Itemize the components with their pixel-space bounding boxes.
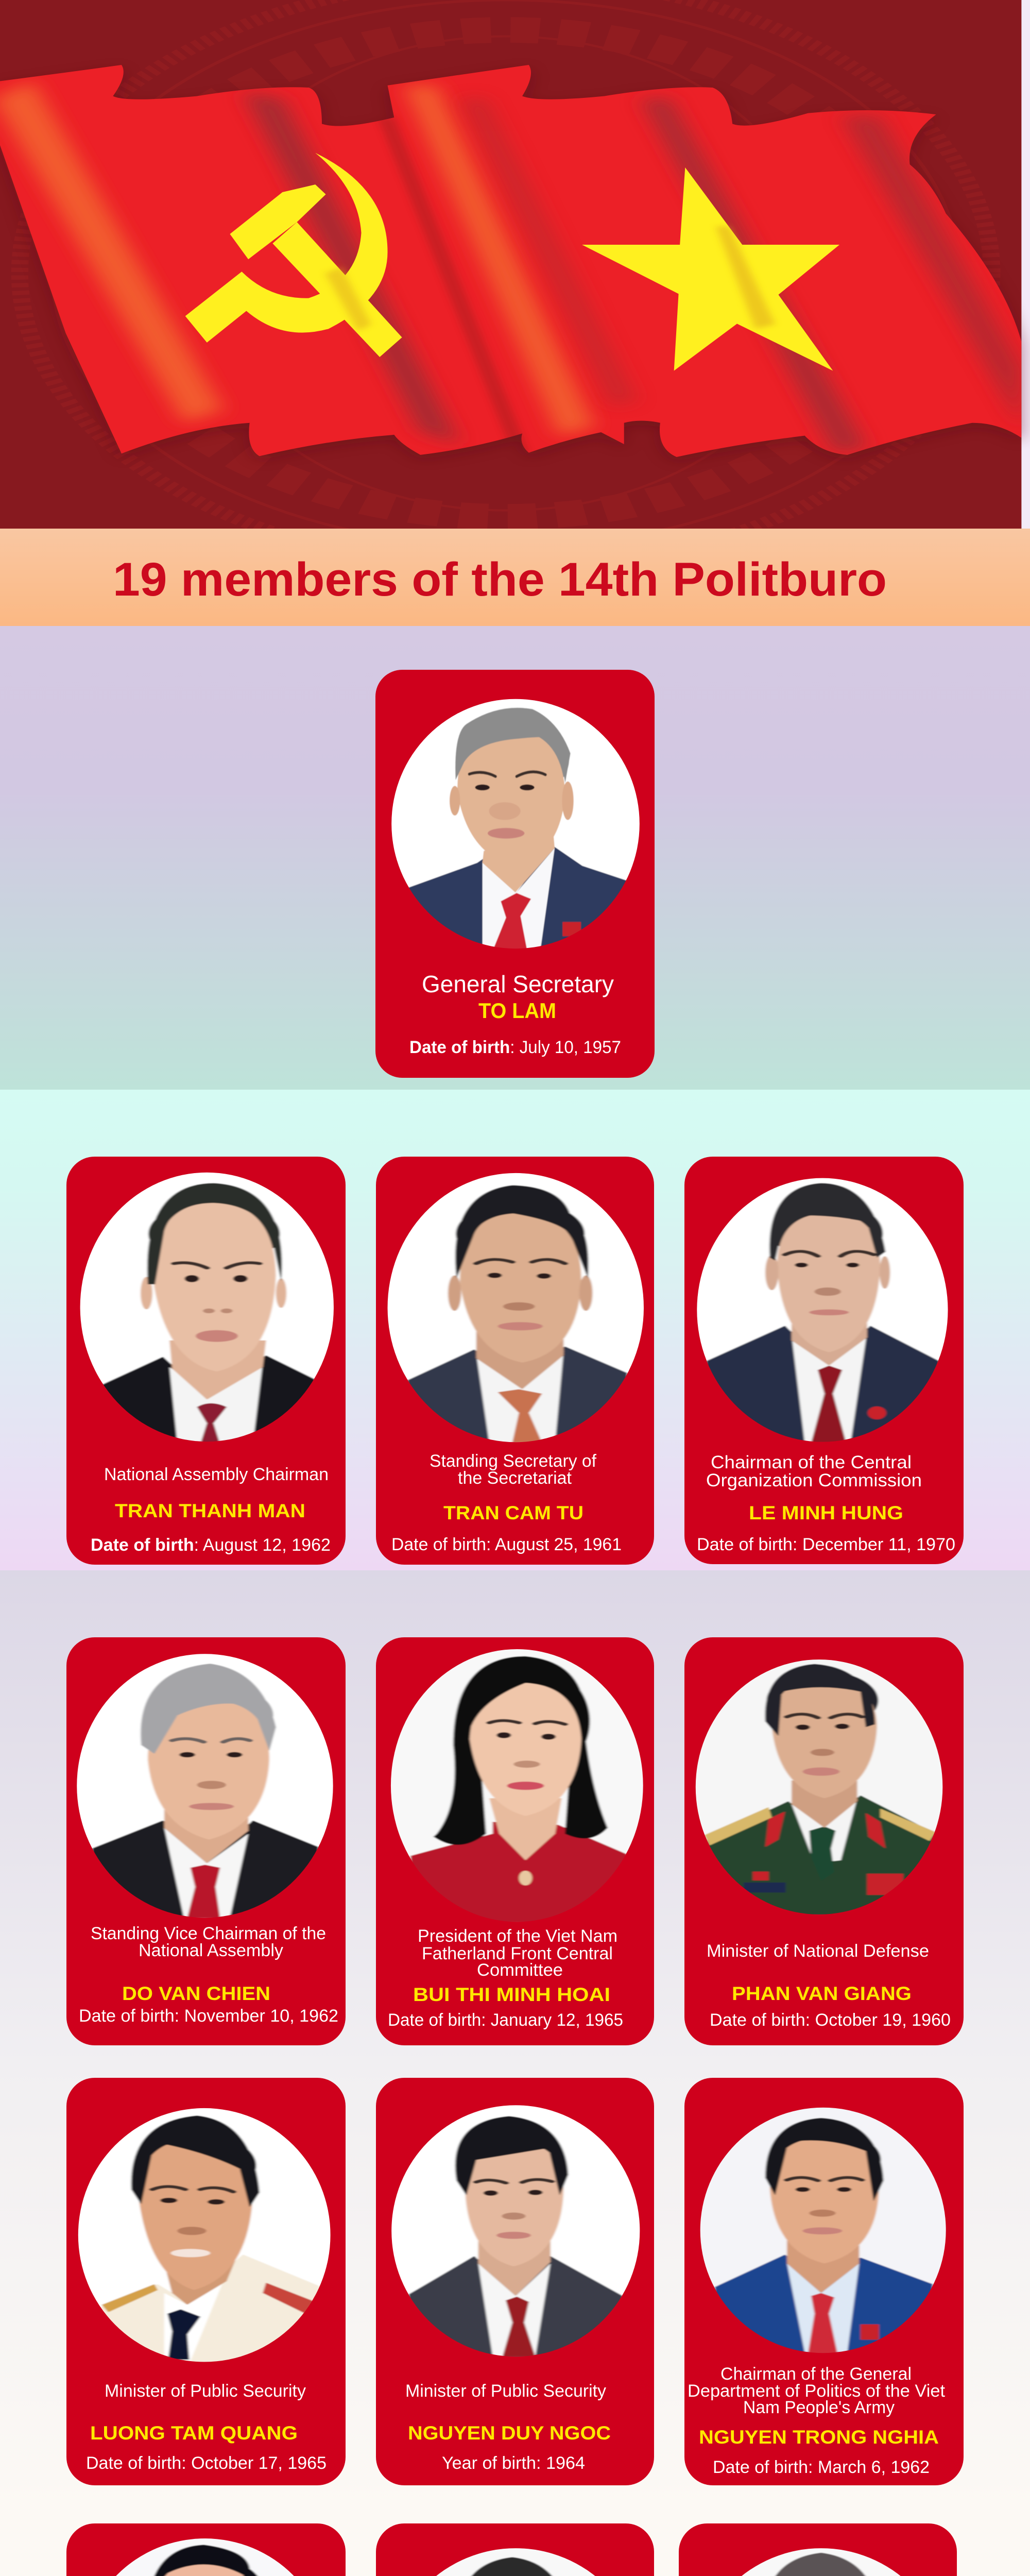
- role: Committee: [477, 1960, 563, 1980]
- portrait: Le Minh Tri: [683, 2533, 966, 2576]
- role: [688, 2364, 946, 2417]
- page background: section one: [0, 626, 1030, 1090]
- role: Fatherland Front Central: [422, 1944, 613, 1963]
- card: PHAN VAN GIANG: [683, 1637, 966, 2045]
- title band: [0, 529, 1030, 626]
- role: Minister of Public Security: [405, 2381, 606, 2401]
- date of birth: Date of birth: January 12, 1965: [388, 2010, 623, 2030]
- role: Standing Secretary of: [430, 1451, 597, 1471]
- card: LE MINH TRI: [679, 2523, 966, 2576]
- role: Minister of National Defense: [707, 1941, 929, 1961]
- date of birth: Date of birth: August 25, 1961: [391, 1535, 622, 1554]
- banner margin strip: [1021, 0, 1030, 529]
- role: General Secretary: [422, 971, 614, 997]
- portrait: Luong Tam Quang: [66, 2095, 362, 2379]
- icon: yellow star: [582, 167, 839, 371]
- portrait: Le Minh Hung: [697, 1178, 948, 1442]
- name: DO VAN CHIEN: [122, 1983, 270, 2004]
- name: TO LAM: [478, 998, 556, 1023]
- role: Chairman of the Central: [711, 1452, 912, 1472]
- portrait: Le Hoai Trung: [374, 2533, 657, 2576]
- role: [706, 1452, 922, 1490]
- portrait: Phan Van Giang: [683, 1641, 966, 1925]
- role: the Secretariat: [458, 1468, 572, 1488]
- date of birth: Date of birth: October 17, 1965: [86, 2453, 327, 2473]
- card: NGUYEN TRONG NGHIA: [683, 2078, 966, 2485]
- portrait: Bui Thi Minh Hoai: [374, 1641, 657, 1925]
- portrait: Do Van Chien: [77, 1654, 333, 1918]
- role: National Assembly Chairman: [104, 1465, 329, 1484]
- portrait: To Lam: [388, 697, 650, 952]
- name: NGUYEN TRONG NGHIA: [699, 2427, 939, 2448]
- portrait: Trinh Van Quyet: [66, 2533, 362, 2576]
- role: [418, 1926, 617, 1980]
- portrait: Tran Cam Tu: [387, 1173, 644, 1443]
- role: [430, 1451, 597, 1488]
- portrait: Nguyen Duy Ngoc: [374, 2095, 657, 2379]
- date of birth: Date of birth: December 11, 1970: [697, 1535, 955, 1554]
- date of birth: Date of birth: March 6, 1962: [713, 2458, 930, 2477]
- card: DO VAN CHIEN: [66, 1637, 362, 2045]
- name: TRAN CAM TU: [443, 1502, 583, 1523]
- role: Standing Vice Chairman of the: [91, 1924, 326, 1943]
- role: National Assembly: [139, 1941, 283, 1960]
- page background: section three: [0, 1570, 1030, 2576]
- role: [91, 1924, 326, 1960]
- title: 19 members of the 14th Politburo: [113, 553, 887, 606]
- card: TRAN CAM TU: [374, 1157, 657, 1565]
- role: Nam People's Army: [743, 2398, 895, 2417]
- role: Chairman of the General: [720, 2364, 912, 2384]
- date of birth: Date of birth: August 12, 1962: [91, 1535, 331, 1555]
- card: TRINH VAN QUYET: [66, 2523, 362, 2576]
- name: BUI THI MINH HOAI: [413, 1984, 610, 2005]
- name: LE MINH HUNG: [749, 1502, 903, 1523]
- name: NGUYEN DUY NGOC: [408, 2422, 611, 2444]
- card: NGUYEN DUY NGOC: [374, 2078, 657, 2485]
- year of birth: Year of birth: 1964: [442, 2453, 585, 2473]
- name: TRAN THANH MAN: [115, 1500, 305, 1521]
- portrait: Tran Thanh Man: [80, 1173, 334, 1442]
- card: TRAN THANH MAN: [66, 1157, 362, 1565]
- card: LE HOAI TRUNG: [374, 2523, 657, 2576]
- role: President of the Viet Nam: [418, 1926, 617, 1946]
- card: LUONG TAM QUANG: [66, 2078, 362, 2485]
- role: Organization Commission: [706, 1470, 922, 1490]
- page background: section two: [0, 1090, 1030, 1570]
- name: LUONG TAM QUANG: [90, 2422, 298, 2444]
- portrait: Nguyen Trong Nghia: [683, 2095, 966, 2379]
- date of birth: Date of birth: July 10, 1957: [409, 1038, 621, 1057]
- name: PHAN VAN GIANG: [732, 1983, 912, 2004]
- card: TO LAM: [375, 670, 655, 1078]
- role: Minister of Public Security: [105, 2381, 306, 2401]
- card: LE MINH HUNG: [683, 1157, 966, 1564]
- card: BUI THI MINH HOAI: [374, 1637, 657, 2045]
- role: Department of Politics of the Viet: [688, 2381, 946, 2401]
- banner: party and national flags: [0, 0, 1021, 568]
- date of birth: Date of birth: October 19, 1960: [710, 2010, 951, 2030]
- date of birth: Date of birth: November 10, 1962: [79, 2006, 338, 2026]
- icon: hammer and sickle: [185, 153, 402, 357]
